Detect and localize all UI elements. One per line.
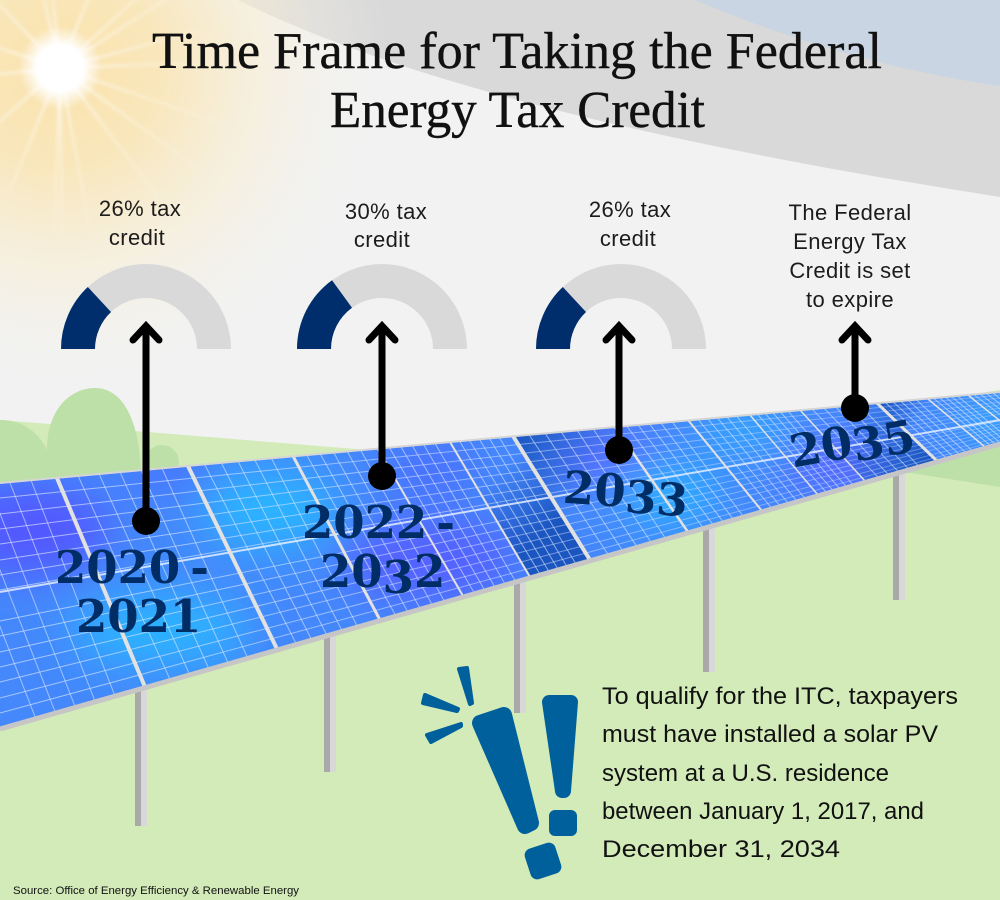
- year: 2033: 20: [561, 461, 628, 518]
- support post 4: [703, 525, 715, 672]
- support post 3: [514, 580, 526, 713]
- year: 2020-2021: 2020-: [55, 541, 209, 594]
- row grid lines: [0, 395, 1000, 713]
- year: 2035: 20: [786, 415, 857, 478]
- icon: exclamation marks: [423, 668, 574, 877]
- gray sky swoosh: [238, 0, 1000, 197]
- column grid lines: [0, 393, 1000, 716]
- label: 26% tax credit: credit: [109, 225, 165, 250]
- label: 30% tax credit: credit: [354, 227, 410, 252]
- label: expiry note: Energy Tax: [793, 229, 907, 254]
- text block: ITC qualification: must have installed a solar PV: [602, 721, 938, 748]
- arrow 2: [368, 326, 396, 490]
- panel dividers: [57, 395, 1000, 687]
- gauge 1: 26%: [61, 264, 231, 349]
- blue sky swoosh: [695, 0, 1000, 86]
- year: 2035: 35: [848, 409, 919, 472]
- sun: [0, 0, 395, 400]
- green ground: [0, 390, 1000, 900]
- arrow 4: [841, 326, 869, 422]
- label: 30% tax credit: 30% tax: [345, 199, 427, 224]
- arrow 1: [132, 326, 160, 535]
- title: Energy Tax Credit: [330, 82, 706, 139]
- label: 26% tax credit: 26% tax: [589, 197, 671, 222]
- label: 26% tax credit: credit: [600, 226, 656, 251]
- panel mid rail: [0, 420, 1000, 592]
- text block: ITC qualification: December 31, 2034: [602, 836, 840, 863]
- text block: ITC qualification: To qualify for the ITC, taxpayers: [602, 683, 958, 710]
- solar panel array: [0, 380, 1000, 750]
- label: 26% tax credit: 26% tax: [99, 196, 181, 221]
- year: 2022-2032: 2022-: [302, 496, 455, 549]
- bushes: [0, 388, 1000, 490]
- label: expiry note: to expire: [806, 287, 894, 312]
- bottom rail: [0, 444, 1000, 729]
- title: Time Frame for Taking the Federal: [152, 23, 882, 80]
- year: 2033: 33: [624, 470, 690, 527]
- year: 2020-2021: [55, 541, 209, 643]
- text block: ITC qualification: system at a U.S. residence: [602, 760, 889, 787]
- source note: Source: Office of Energy Efficiency & Renewable Energy: [13, 885, 300, 897]
- year: 2022-2032: 20: [320, 545, 383, 598]
- gauge 3: 26%: [536, 264, 706, 349]
- label: expiry note: The Federal: [788, 200, 912, 225]
- year: 2020-2021: 2021: [76, 590, 201, 643]
- title: [152, 23, 882, 139]
- text block: ITC qualification: between January 1, 2017, and: [602, 798, 924, 825]
- label: expiry note: Credit is set: [789, 258, 911, 283]
- year: 2022-2032: 2: [414, 545, 445, 598]
- year: 2022-2032: [302, 496, 455, 604]
- gauge 2: 30%: [297, 264, 467, 349]
- year: 2022-2032: 3: [383, 551, 414, 604]
- top rail: [0, 392, 1000, 483]
- support post 1: [135, 688, 147, 826]
- support post 2: [324, 634, 336, 772]
- arrow 3: [605, 326, 633, 464]
- support post 5: [893, 472, 905, 600]
- text block: ITC qualification: [602, 683, 958, 863]
